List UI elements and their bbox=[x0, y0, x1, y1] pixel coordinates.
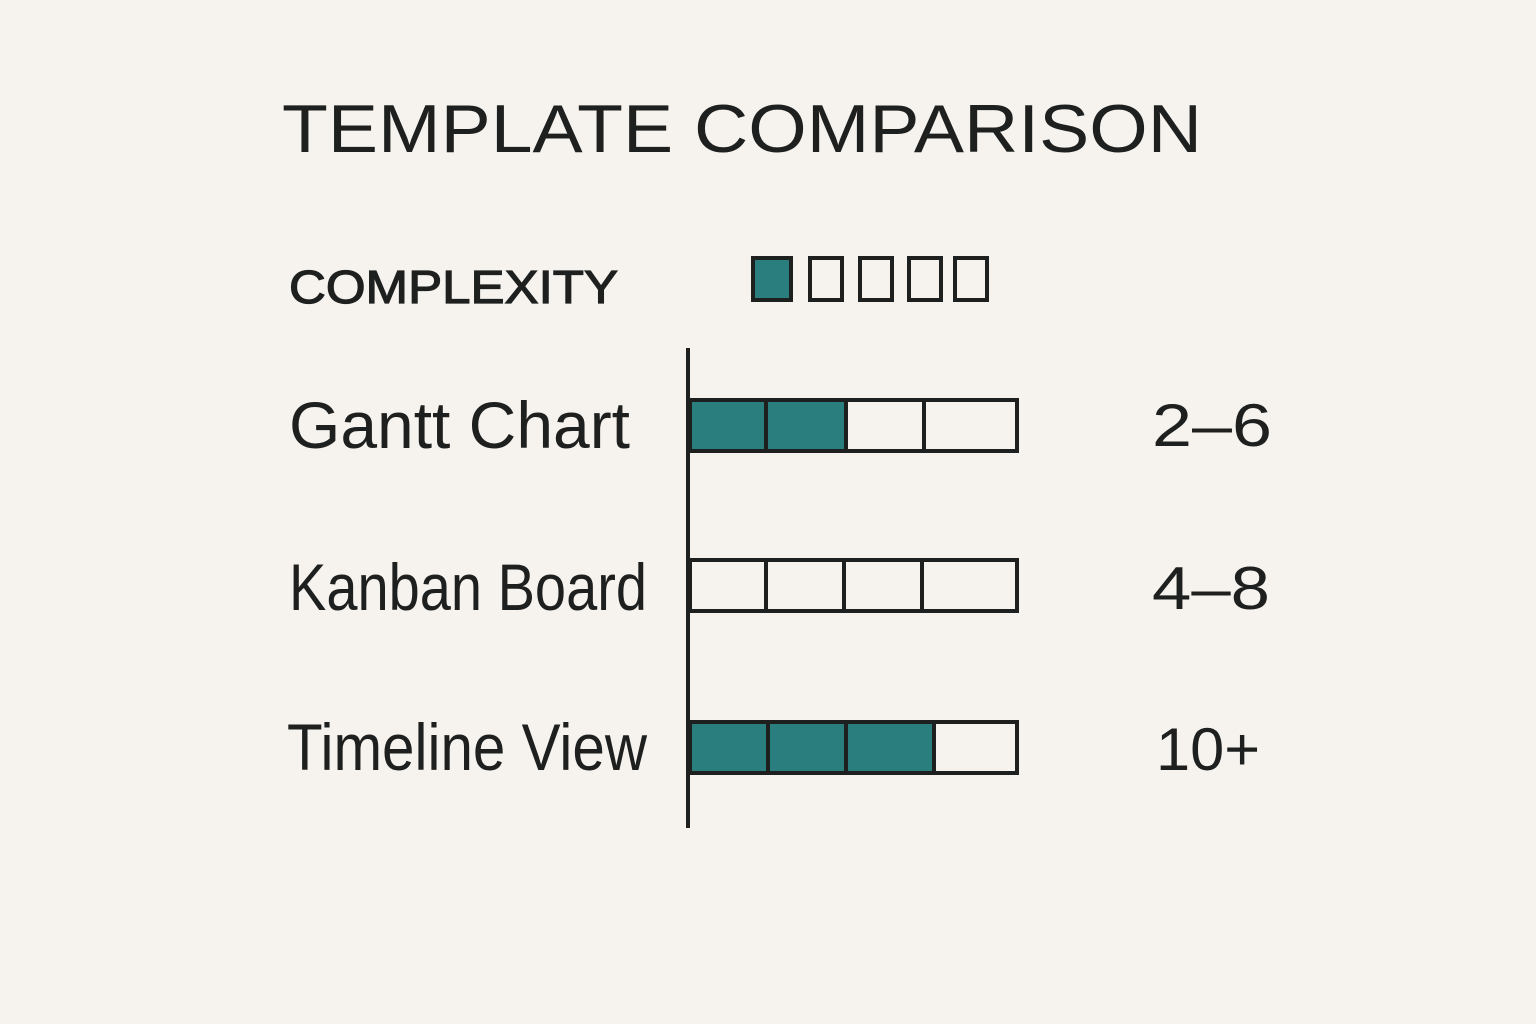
axis line bbox=[686, 348, 690, 828]
row: Timeline View bbox=[287, 710, 1260, 784]
legend squares bbox=[753, 258, 987, 300]
row: Timeline View: 10+ bbox=[1156, 716, 1260, 783]
row: Kanban Board: 4–8 bbox=[1152, 555, 1270, 622]
row: Kanban Board: Kanban Board bbox=[289, 550, 647, 624]
row: Kanban Board bbox=[289, 550, 1270, 624]
row: Gantt Chart: 2–6 bbox=[1152, 392, 1272, 459]
row: Timeline View: Timeline View bbox=[287, 710, 647, 784]
title: TEMPLATE COMPARISON bbox=[282, 91, 1202, 167]
legend label: COMPLEXITY bbox=[289, 261, 618, 313]
row: Gantt Chart bbox=[289, 388, 1272, 462]
row: Gantt Chart: Gantt Chart bbox=[289, 388, 630, 462]
